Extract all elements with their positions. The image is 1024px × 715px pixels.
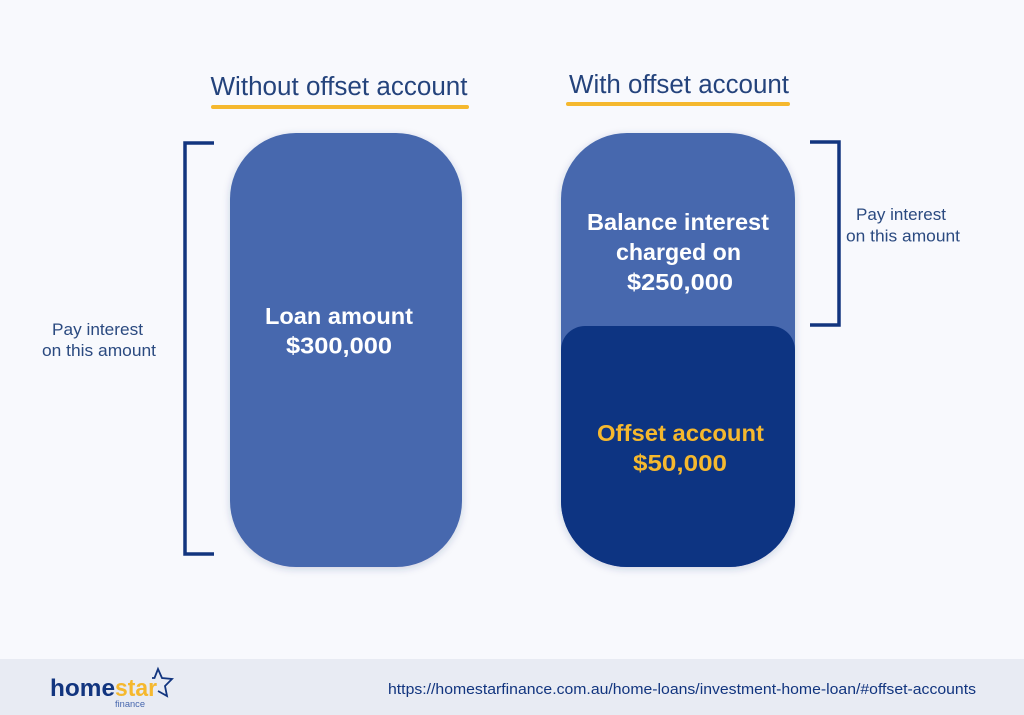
logo: homestar finance	[50, 669, 172, 709]
heading: without offset account: Without offset account	[210, 73, 468, 101]
text: offset account: Offset account	[597, 420, 764, 446]
text: offset account: $50,000	[633, 450, 727, 476]
footer band	[0, 659, 1024, 715]
text: loan amount: Loan amount	[265, 303, 413, 329]
url: https://homestarfinance.com.au/home-loans/investment-home-loan/#offset-accounts	[388, 682, 976, 698]
label: pay interest left: Pay interest	[52, 321, 143, 339]
logo: homestar finance: finance	[115, 699, 145, 709]
bracket: right balance interest	[810, 142, 839, 325]
label: pay interest right	[846, 206, 960, 246]
label: pay interest left: on this amount	[42, 342, 156, 360]
panel: offset account	[561, 326, 795, 567]
text: loan amount	[265, 303, 413, 358]
panel: balance and offset stacked	[561, 133, 795, 567]
text: loan amount: $300,000	[286, 332, 392, 358]
text: offset account	[597, 420, 764, 476]
label: pay interest left	[42, 321, 156, 360]
logo: homestar finance: home	[50, 675, 115, 702]
icon: star	[152, 669, 172, 696]
logo: homestar finance: star	[115, 675, 157, 702]
text: balance interest	[587, 209, 769, 295]
text: balance interest: $250,000	[627, 269, 733, 295]
label: pay interest right: on this amount	[846, 228, 960, 246]
text: balance interest: Balance interest	[587, 209, 769, 235]
bracket: left loan interest	[185, 143, 214, 554]
text: balance interest: charged on	[616, 239, 741, 265]
heading: with offset account: With offset account	[569, 71, 789, 99]
panel: loan amount	[230, 133, 462, 567]
label: pay interest right: Pay interest	[856, 206, 946, 224]
